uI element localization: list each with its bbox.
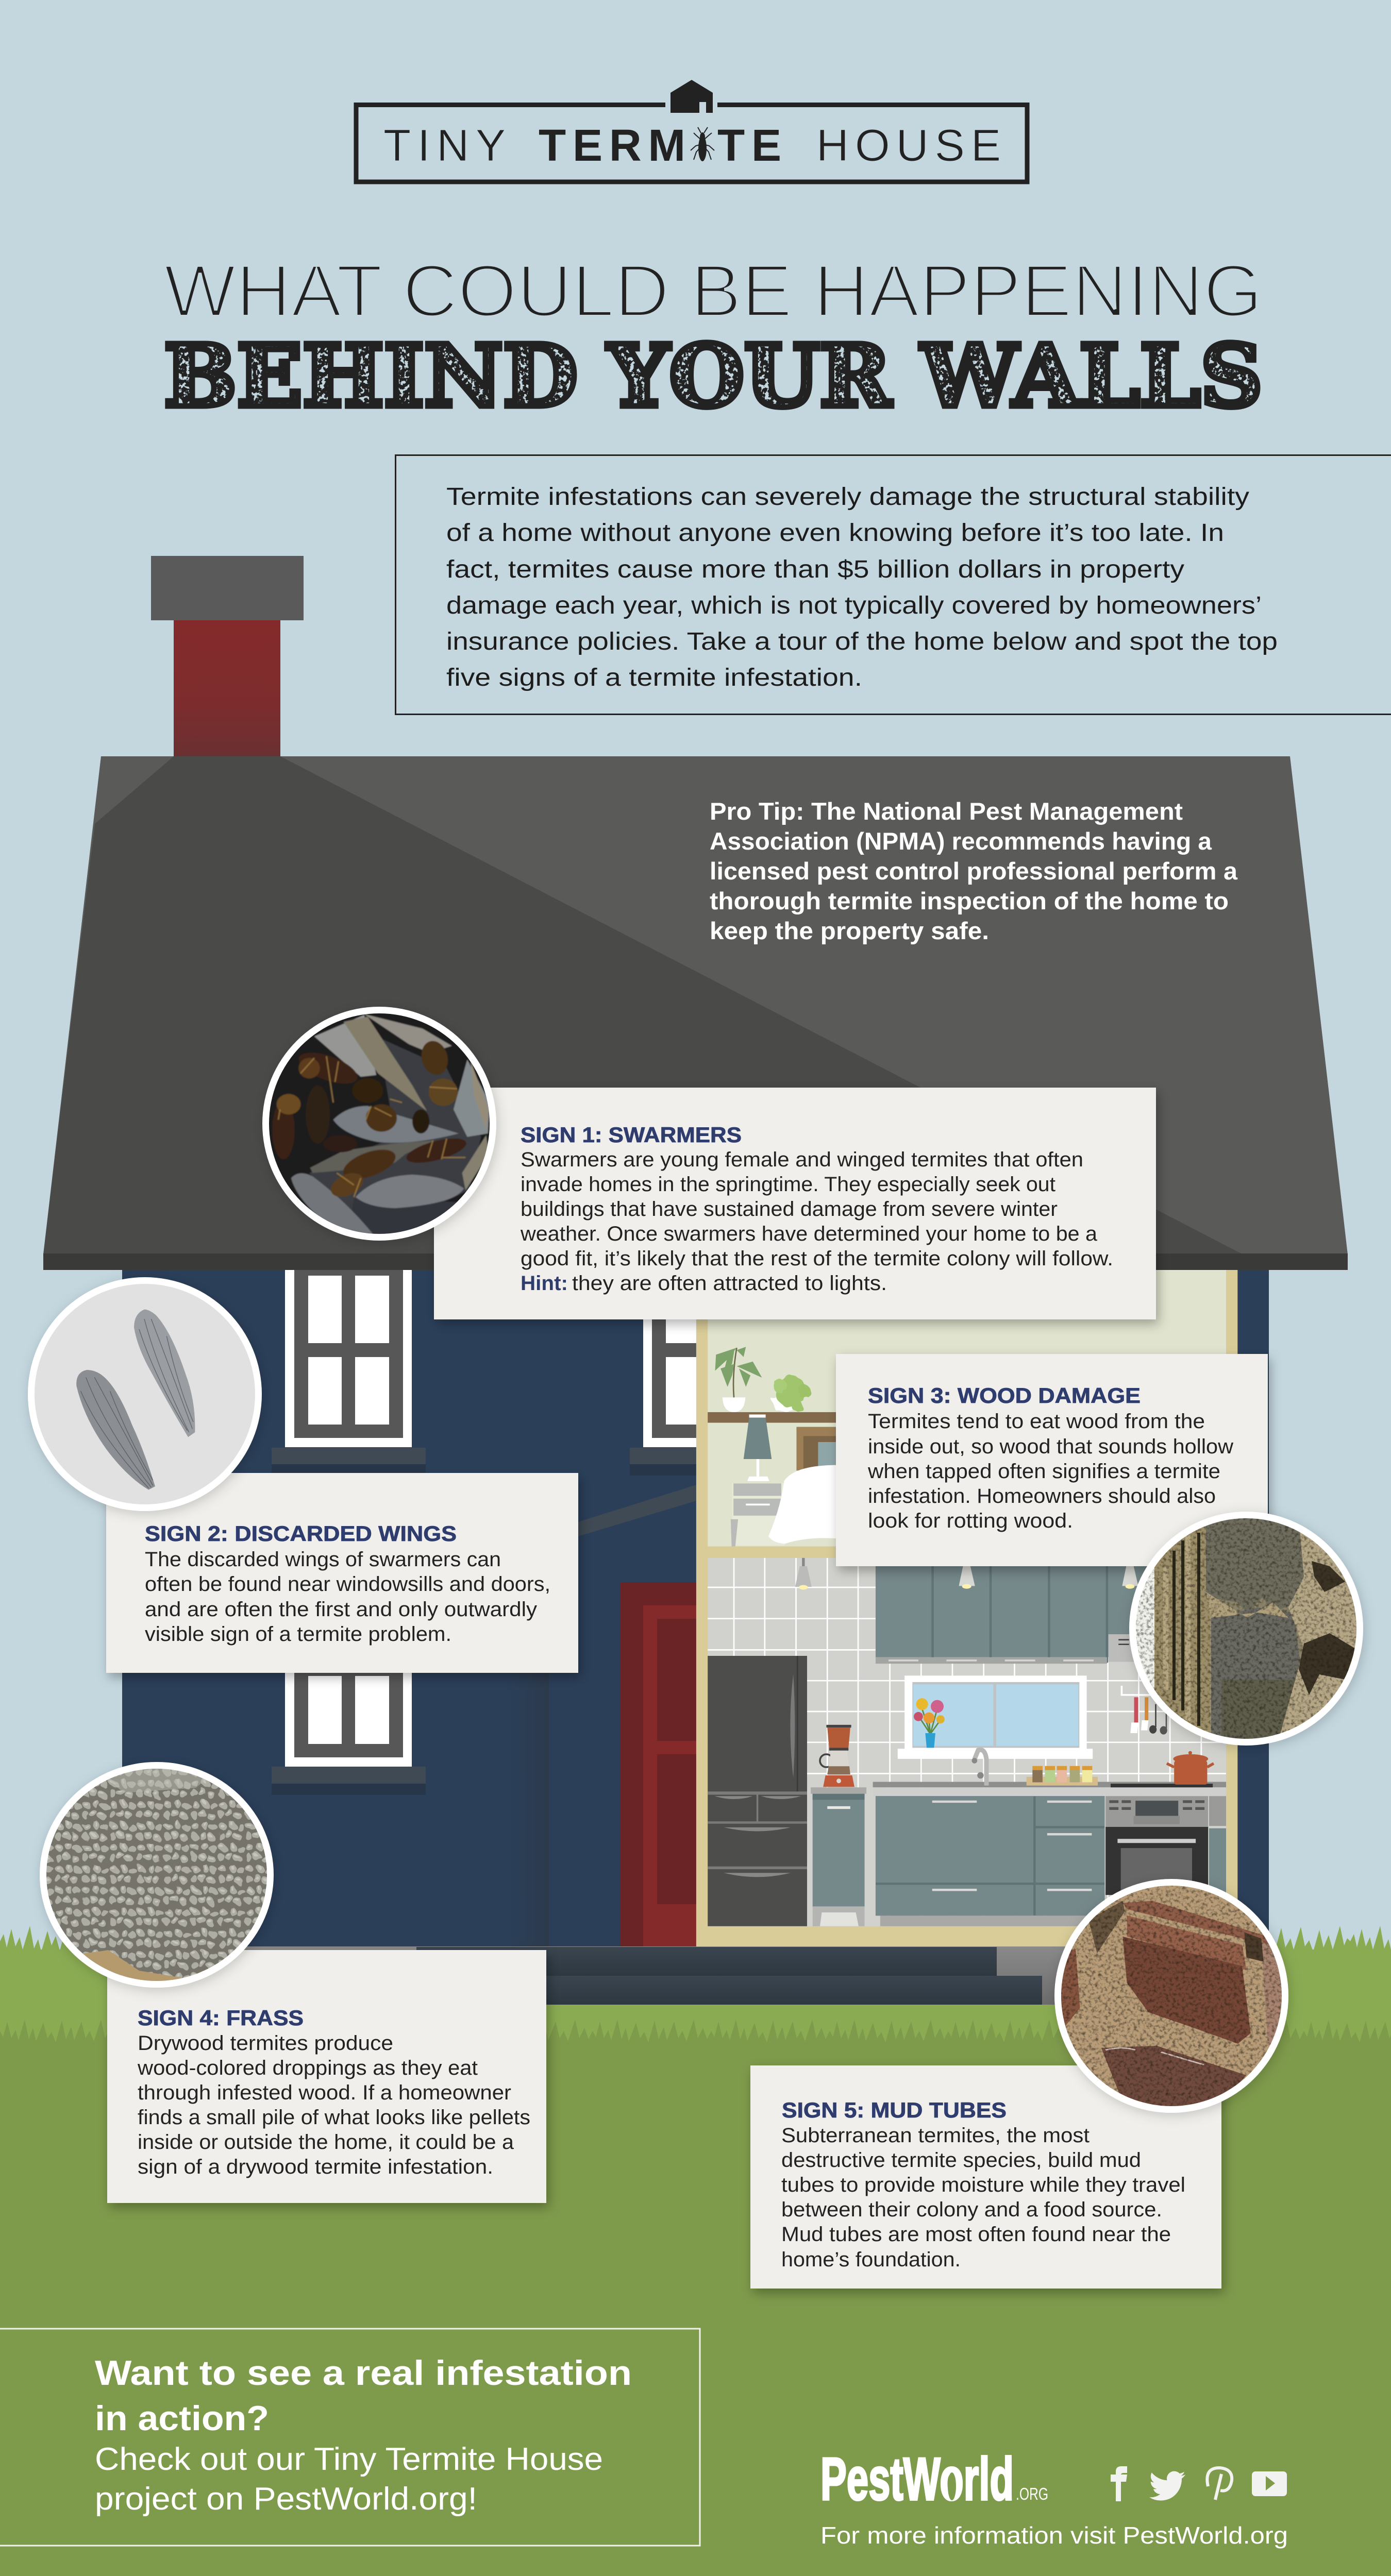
icon: mud tubes photo <box>1054 1877 1289 2113</box>
logo word: term: TERM <box>539 121 685 171</box>
ceiling lights <box>795 1558 1138 1589</box>
sign 2 body: and are often the first and only outwardly <box>145 1598 537 1621</box>
cutaway interior <box>696 1267 1237 1946</box>
call to action text <box>95 2442 603 2517</box>
sign 2 body <box>145 1548 550 1646</box>
roof shadow <box>43 756 1243 1255</box>
sign 3 body: Termites tend to eat wood from the <box>868 1410 1205 1433</box>
sign 5 body <box>781 2124 1185 2271</box>
lower cabinets <box>876 1796 1230 1926</box>
eave band <box>43 1253 1348 1270</box>
bed <box>768 1427 838 1544</box>
icon: swarmers photo <box>258 999 505 1247</box>
sign 1 body: they are often attracted to lights. <box>572 1272 887 1295</box>
logo word: te: TE <box>717 121 781 171</box>
sign 3 body: inside out, so wood that sounds hollow <box>868 1435 1233 1458</box>
call to action text: Check out our Tiny Termite House <box>95 2442 603 2477</box>
icon: youtube <box>1252 2471 1287 2496</box>
panel: sign 3 wood damage <box>836 1354 1268 1566</box>
intro text box: insurance policies. Take a tour of the home below and spot the top <box>446 628 1278 655</box>
plant: bush <box>770 1376 811 1412</box>
chimney <box>151 556 304 757</box>
sign 4 body: sign of a drywood termite infestation. <box>138 2156 493 2178</box>
spice jars <box>1027 1768 1098 1786</box>
front steps <box>245 1946 1211 2005</box>
lawn <box>0 1950 1391 2576</box>
icon: termite <box>691 127 714 161</box>
title <box>164 249 1263 427</box>
logo word: tiny: TINY <box>383 121 506 171</box>
roof <box>43 756 1348 1270</box>
hanging utensils <box>1121 1686 1167 1735</box>
title line 2: BEHIND YOUR WALLS <box>164 326 1263 427</box>
faucet <box>971 1750 986 1786</box>
intro text box: Termite infestations can severely damage the structural stability <box>446 483 1249 511</box>
sign 4 body: inside or outside the home, it could be a <box>138 2131 514 2154</box>
flowers in vase <box>914 1698 945 1748</box>
logo word: house: HOUSE <box>816 121 1001 171</box>
window: upper left <box>272 1270 426 1476</box>
cooking pot <box>1111 1751 1214 1787</box>
logo: Tiny Termite House <box>356 80 1027 182</box>
sign 3 body: when tapped often signifies a termite <box>867 1460 1220 1483</box>
pro tip: keep the property safe. <box>710 917 989 944</box>
sign 4 body: wood-colored droppings as they eat <box>137 2057 478 2079</box>
sign 1 body: buildings that have sustained damage from severe winter <box>521 1198 1058 1221</box>
panel: sign 4 frass <box>107 1950 546 2203</box>
kitchen window <box>898 1675 1093 1759</box>
sign 4 body: Drywood termites produce <box>138 2032 393 2055</box>
bedside lamp <box>744 1414 772 1481</box>
sign 5 body: tubes to provide moisture while they travel <box>781 2174 1185 2196</box>
panel: sign 1 swarmers <box>434 1088 1156 1319</box>
icon: facebook <box>1111 2466 1127 2501</box>
panel: sign 5 mud tubes <box>750 2065 1221 2289</box>
intro text box: damage each year, which is not typically covered by homeowners’ <box>446 592 1262 619</box>
sign 1 heading: SIGN 1: SWARMERS <box>521 1123 742 1147</box>
plant: palm <box>715 1347 762 1412</box>
PestWorld logo: PestWorld <box>820 2445 1014 2513</box>
sign 5 body: between their colony and a food source. <box>781 2198 1162 2221</box>
window: lower left <box>272 1649 426 1795</box>
refrigerator <box>708 1656 807 1926</box>
intro text box <box>396 455 1391 714</box>
sign 2 body: often be found near windowsills and doors, <box>145 1573 550 1596</box>
tile wall <box>708 1558 1226 1926</box>
sign 4 body: through infested wood. If a homeowner <box>138 2081 511 2104</box>
intro text box: fact, termites cause more than $5 billion dollars in property <box>446 556 1184 583</box>
sign 1 body: Swarmers are young female and winged termites that often <box>521 1148 1083 1171</box>
sign 2 body: visible sign of a termite problem. <box>145 1623 451 1646</box>
sign 5 heading: SIGN 5: MUD TUBES <box>782 2098 1007 2122</box>
sign 5 body: destructive termite species, build mud <box>781 2149 1141 2172</box>
nightstand <box>731 1483 785 1547</box>
upper grass <box>0 1926 1391 1957</box>
pro tip: Pro Tip: The National Pest Management <box>710 798 1183 825</box>
sign 1 body <box>520 1148 1113 1295</box>
icon: pinterest <box>1207 2468 1232 2500</box>
oven <box>1105 1796 1226 1895</box>
house walls <box>122 1270 1269 1947</box>
window: upper right <box>630 1270 784 1476</box>
icon: wood damage photo <box>1129 1512 1363 1745</box>
title line 2: BEHIND YOUR WALLS <box>164 326 1263 427</box>
intro text box: five signs of a termite infestation. <box>446 664 862 691</box>
cutaway frame <box>696 1267 1237 1946</box>
sign 2 body: The discarded wings of swarmers can <box>145 1548 501 1571</box>
call to action text: project on PestWorld.org! <box>95 2481 477 2517</box>
title line 1: WHAT COULD BE HAPPENING <box>164 249 1263 332</box>
sign 5 body: home’s foundation. <box>781 2248 961 2271</box>
sign 3 heading: SIGN 3: WOOD DAMAGE <box>868 1383 1141 1408</box>
side cabinet <box>811 1787 866 1926</box>
icon: discarded wings photo <box>28 1277 262 1511</box>
pro tip: thorough termite inspection of the home to <box>710 887 1229 914</box>
icon: logo house <box>671 80 713 113</box>
counter <box>873 1782 1226 1796</box>
PestWorld logo: .ORG <box>1016 2484 1048 2503</box>
pro tip <box>710 798 1238 944</box>
sign 1 body: Hint: <box>521 1272 568 1295</box>
sign 3 body: look for rotting wood. <box>868 1510 1073 1532</box>
call to action heading <box>95 2353 632 2438</box>
icon: twitter <box>1149 2471 1185 2501</box>
floor divider <box>708 1547 1226 1558</box>
call to action heading: in action? <box>95 2399 269 2438</box>
footer link text: For more information visit PestWorld.org <box>820 2522 1288 2549</box>
coffee maker <box>820 1725 854 1787</box>
sign 5 body: Subterranean termites, the most <box>781 2124 1090 2147</box>
sign 3 body: infestation. Homeowners should also <box>868 1485 1216 1507</box>
panel: sign 2 discarded wings <box>106 1473 578 1673</box>
sign 1 body: weather. Once swarmers have determined your home to be a <box>520 1223 1098 1245</box>
icon: frass photo <box>40 1762 274 1989</box>
shelf <box>708 1412 836 1423</box>
sign 4 heading: SIGN 4: FRASS <box>138 2006 304 2030</box>
upper cabinets <box>876 1566 1152 1664</box>
intro text box: of a home without anyone even knowing before it’s too late. In <box>446 519 1224 547</box>
sign 5 body: Mud tubes are most often found near the <box>781 2223 1171 2246</box>
pro tip: Association (NPMA) recommends having a <box>710 827 1212 855</box>
sign 4 body: finds a small pile of what looks like pellets <box>138 2106 530 2129</box>
sign 4 body <box>137 2032 530 2178</box>
sign 2 heading: SIGN 2: DISCARDED WINGS <box>145 1521 457 1546</box>
bedroom wall <box>708 1267 1226 1547</box>
call to action box <box>0 2329 700 2546</box>
sign 1 body: good fit, it’s likely that the rest of the termite colony will follow. <box>521 1247 1113 1270</box>
sign 3 body <box>867 1410 1233 1532</box>
front door <box>621 1582 708 1947</box>
pro tip: licensed pest control professional perform a <box>710 857 1238 885</box>
sign 1 body: invade homes in the springtime. They especially seek out <box>521 1173 1055 1196</box>
call to action heading: Want to see a real infestation <box>95 2353 632 2393</box>
